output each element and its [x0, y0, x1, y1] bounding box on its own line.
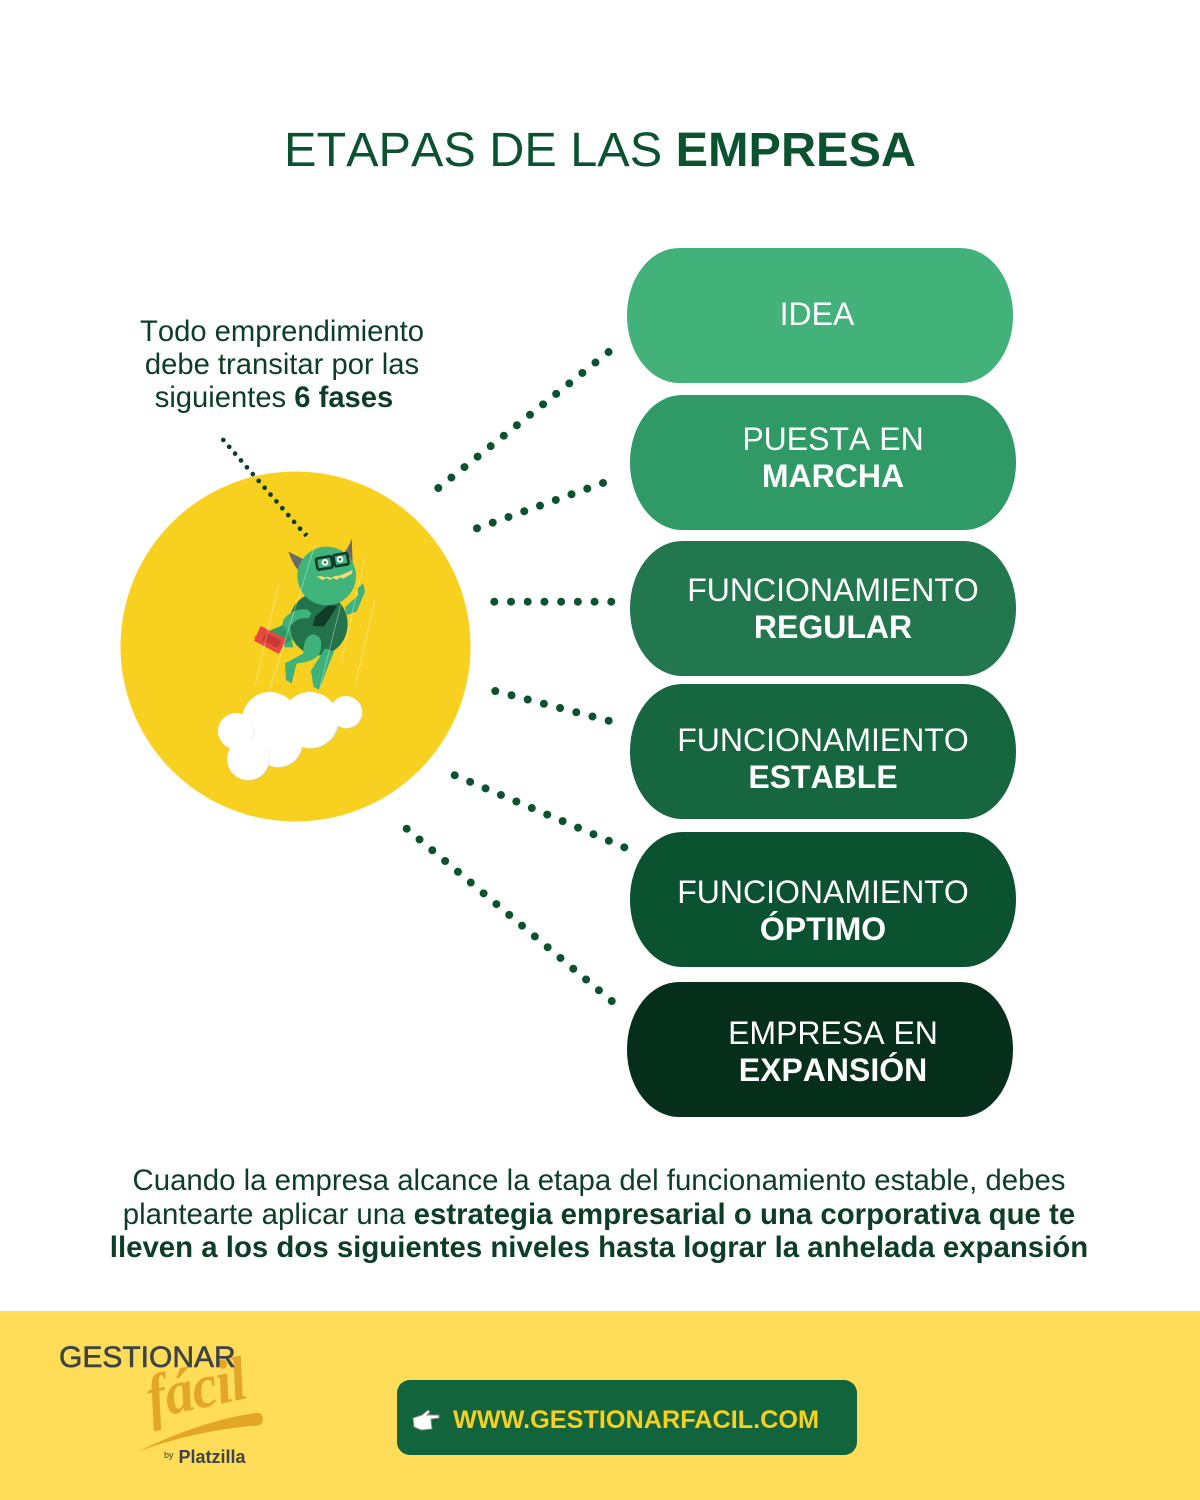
- logo swoosh: [138, 1412, 263, 1452]
- stage pill: funcionamiento regular: [630, 541, 1016, 676]
- logo script: fácil: [140, 1345, 252, 1432]
- stage pill: puesta en marcha: PUESTA EN: [742, 421, 924, 457]
- conclusion text: [110, 1164, 1088, 1264]
- stage pill: funcionamiento estable: FUNCIONAMIENTO: [677, 722, 969, 758]
- intro text: Todo emprendimiento: [140, 316, 424, 348]
- stage pill: funcionamiento optimo: [630, 832, 1016, 967]
- website button: [397, 1380, 857, 1455]
- dotted connector lines: [223, 352, 625, 1001]
- stage pill: puesta en marcha: MARCHA: [762, 458, 904, 494]
- conclusion text: lleven a los dos siguientes niveles hasta lograr la anhelada expansión: [110, 1231, 1088, 1264]
- stage pill: funcionamiento estable: [630, 684, 1016, 819]
- stage pill: funcionamiento regular: REGULAR: [754, 609, 912, 645]
- stage pill: idea: [627, 248, 1013, 383]
- icon: pointing hand: [412, 1410, 440, 1430]
- stage pill: empresa en expansion: EXPANSIÓN: [739, 1052, 927, 1088]
- logo byline: by Platzilla: [164, 1447, 246, 1467]
- intro text: [140, 316, 424, 414]
- stage pill: funcionamiento optimo: ÓPTIMO: [760, 911, 886, 947]
- monster character: [253, 538, 375, 692]
- stage pill: empresa en expansion: [627, 982, 1013, 1117]
- stage pill: empresa en expansion: EMPRESA EN: [728, 1015, 938, 1051]
- intro text: debe transitar por las: [145, 348, 419, 380]
- stage pill: funcionamiento optimo: FUNCIONAMIENTO: [677, 874, 969, 910]
- intro text: siguientes 6 fases: [155, 382, 393, 414]
- cloud: [218, 692, 362, 780]
- stage pill: idea: IDEA: [780, 296, 854, 332]
- illustration: yellow circle with monster on cloud: [120, 348, 628, 1005]
- title: ETAPAS DE LAS EMPRESA: [284, 122, 916, 176]
- stage pill: funcionamiento regular: FUNCIONAMIENTO: [687, 572, 979, 608]
- logo: [59, 1341, 263, 1467]
- logo wordmark: GESTIONAR: [59, 1341, 236, 1374]
- stage pill: puesta en marcha: [630, 395, 1016, 530]
- website url: WWW.GESTIONARFACIL.COM: [453, 1406, 819, 1434]
- footer band: [0, 1311, 1200, 1500]
- stage pill: funcionamiento estable: ESTABLE: [748, 759, 898, 795]
- conclusion text: Cuando la empresa alcance la etapa del funcionamiento estable, debes: [133, 1164, 1065, 1197]
- conclusion text: plantearte aplicar una estrategia empresarial o una corporativa que te: [123, 1198, 1075, 1230]
